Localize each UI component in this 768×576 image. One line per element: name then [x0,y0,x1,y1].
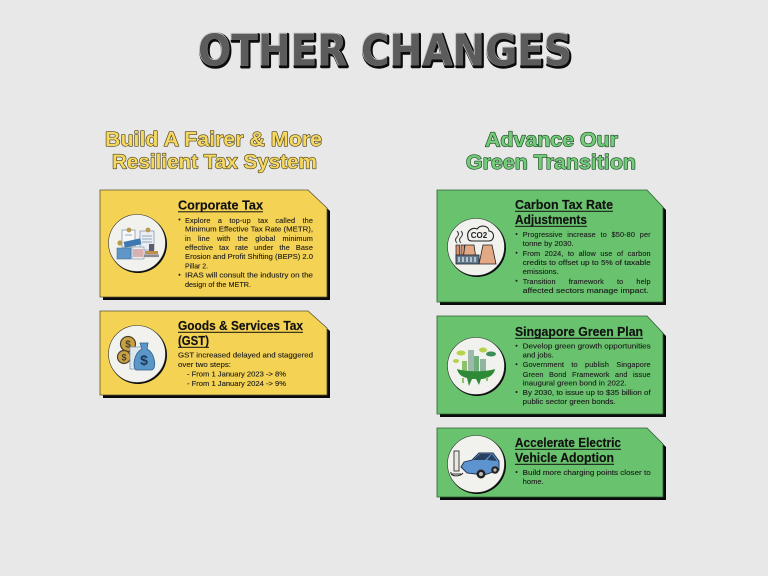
title: OTHER CHANGES [198,25,572,76]
icon: factory and CO2: CO2 [471,231,488,240]
card title: (GST) [178,333,209,348]
bullet list: Build more charging points closer to [523,468,651,477]
bullet list: By 2030, to issue up to $35 billion of [523,388,652,397]
bullet list: home. [523,477,544,486]
bullet list: Minimum Effective Tax Rate (METR), [185,224,313,234]
panel: electric vehicle adoption [437,428,666,500]
bullet list: emissions. [523,267,559,276]
panel: carbon tax [437,190,666,305]
bullet list: Government to publish Singapore [523,360,651,369]
icon: coins and money bag: $ [125,340,131,350]
bullet list: and jobs. [523,351,554,360]
bullet list: design of the METR. [185,280,251,289]
bullet list: Pillar 2. [185,261,208,270]
card title: Vehicle Adoption [515,450,614,465]
card title: Singapore Green Plan [515,324,643,339]
bullet list: affected sectors manage impact. [523,286,649,295]
body text: over two steps: [178,360,231,369]
bullet list: Erosion and Profit Shifting (BEPS) 2.0 [185,252,313,261]
icon: coins and money bag: $ [140,352,148,368]
bullet list: effective tax rate under the Base [185,243,313,252]
card title: Corporate Tax [178,198,264,212]
bullet list: credits to offset up to 5% of taxable [523,258,651,267]
body text: GST increased delayed and staggered [178,351,313,360]
body text [178,351,313,388]
title: OTHER CHANGES [198,26,572,76]
bullet list: Green Bond Framework and issue [523,370,651,378]
card title: Carbon Tax Rate [515,197,613,212]
panel: goods and services tax [100,311,330,398]
icon: coins and money bag [108,326,167,384]
bullet list: in line with the global minimum [185,234,313,243]
bullet list: Progressive increase to $50-80 per [523,230,651,239]
heading: fairer tax system [105,129,322,174]
icon: coins and money bag: $ [121,352,127,362]
card title: Accelerate Electric [515,435,621,450]
bullet list: public sector green bonds. [523,397,616,406]
panel: singapore green plan [437,316,666,417]
icon: green city [448,338,506,396]
bullet list [516,342,653,406]
bullet list: Explore a top-up tax called the [185,216,313,224]
bullet list [178,216,315,289]
icon: tax documents [108,214,167,273]
bullet list: From 2024, to allow use of carbon [523,249,651,258]
bullet list: IRAS will consult the industry on the [185,271,313,280]
heading: green transition [466,130,636,174]
heading: fairer tax system: Build A Fairer & More [105,129,322,151]
body text: - From 1 January 2024 -> 9% [187,379,287,388]
bullet list: tonne by 2030. [523,239,574,248]
icon: factory and CO2 [448,218,506,277]
bullet list: Develop green growth opportunities [523,342,651,351]
bullet list [516,468,651,486]
card title [515,435,621,465]
bullet list: Transition framework to help [523,277,651,286]
card title: Adjustments [515,212,587,227]
card title [515,197,613,227]
title: OTHER CHANGES [199,26,573,77]
heading: green transition: Green Transition [466,152,636,174]
bullet list [516,230,653,295]
heading: fairer tax system: Resilient Tax System [112,152,317,174]
card title: Goods & Services Tax [178,318,304,333]
body text: - From 1 January 2023 -> 8% [187,370,287,379]
panel: corporate tax [100,190,330,300]
bullet list: inaugural green bond in 2022. [523,379,627,388]
icon: electric car and charger [448,436,506,494]
heading: green transition: Advance Our [485,130,618,152]
card title [178,318,304,348]
